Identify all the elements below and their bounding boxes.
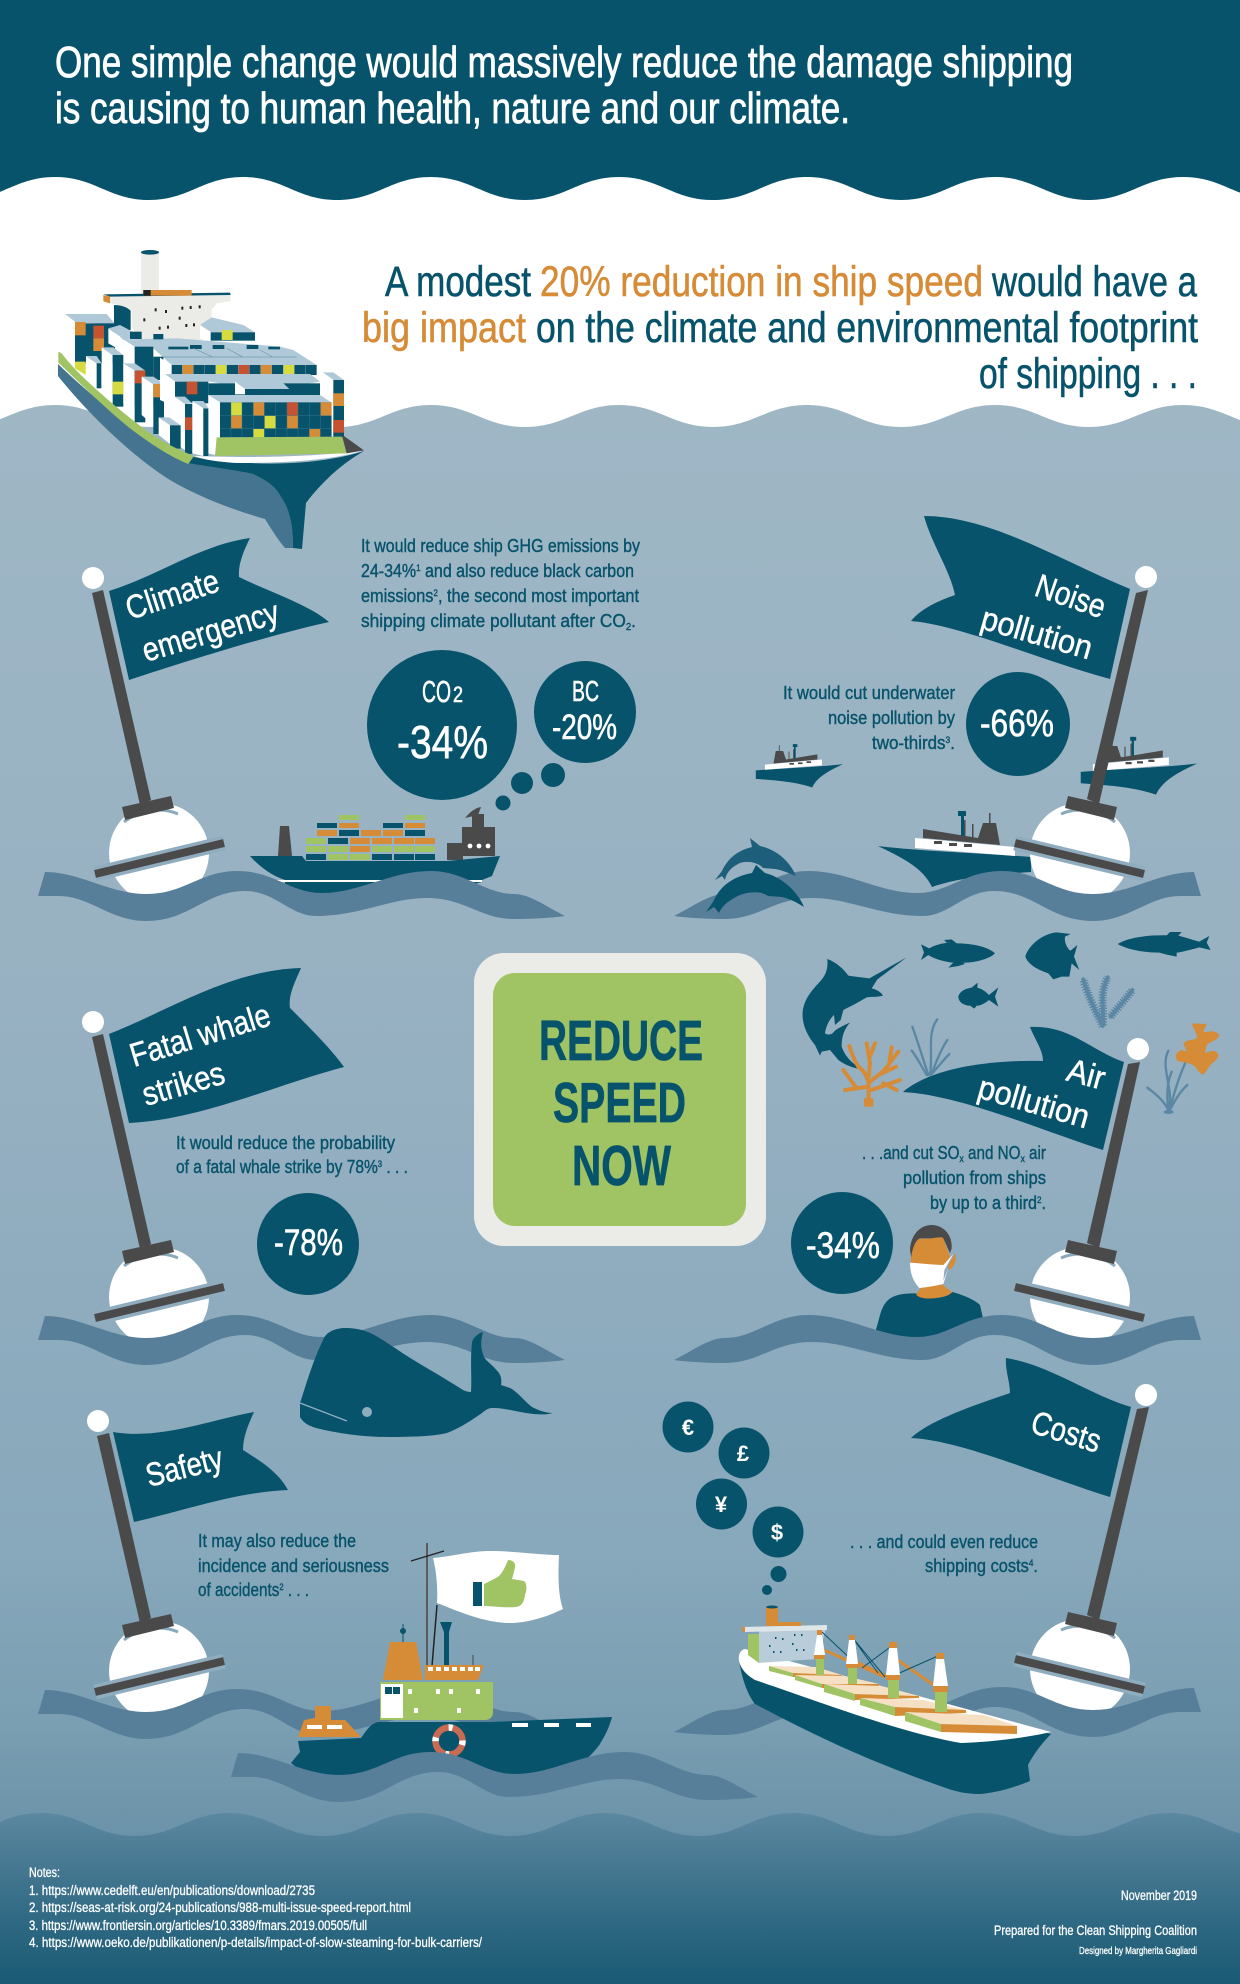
icon: slim fish [1118, 932, 1211, 957]
right tower [323, 372, 344, 437]
wave ribbon: climate [38, 871, 565, 921]
climate text: 2 [626, 622, 632, 633]
flag: fatal whale strikes: strikes [138, 1054, 229, 1113]
currency bubbles: € [682, 1415, 694, 1440]
safety text: incidence and seriousness [198, 1556, 389, 1576]
footer credits [994, 1888, 1197, 1957]
hull [739, 1660, 1051, 1794]
notes: 1. https://www.cedelft.eu/en/publications/download/2735 [29, 1883, 315, 1898]
subtitle [362, 258, 1198, 398]
subtitle: 20% reduction in ship speed [540, 258, 983, 306]
bubble: -34% air [791, 1192, 893, 1294]
wave ribbon: costs [674, 1687, 1201, 1737]
air text: 2 [1037, 1195, 1041, 1205]
costs text: 4 [1029, 1558, 1033, 1568]
superstructure [748, 1634, 759, 1663]
notes: Notes: [29, 1865, 60, 1880]
safety text: . . . [284, 1580, 309, 1600]
bubble: -66%: -66% [980, 703, 1054, 745]
bubble: CO2 -34% [367, 650, 517, 800]
air text: x [1021, 1154, 1025, 1165]
noise text [783, 683, 955, 753]
flag: air pollution: pollution [974, 1068, 1094, 1135]
buoy: whale strikes [82, 1011, 224, 1347]
superstructure [400, 1628, 406, 1634]
safety text [198, 1531, 389, 1600]
flag with thumb [433, 1551, 563, 1623]
flag: climate emergency: emergency [137, 593, 284, 669]
middle block [108, 325, 317, 407]
front block [208, 395, 332, 455]
center box: reduce speed now: REDUCE [539, 1009, 703, 1073]
icon: small ship right [1081, 737, 1197, 795]
whale text: It would reduce the probability [176, 1133, 395, 1153]
buoy: costs [1015, 1384, 1157, 1719]
icon: container ship small [250, 807, 500, 899]
icon: ship in front of noise buoy [878, 811, 1031, 887]
buoy: climate [82, 567, 224, 903]
bubble: CO2 -34%: -34% [397, 716, 488, 768]
climate text: 2 [433, 588, 438, 598]
noise text: noise pollution by [828, 708, 955, 728]
flag: climate emergency [109, 538, 329, 680]
currency bubbles: £ [737, 1441, 750, 1466]
booms [824, 1650, 938, 1688]
climate text: emissions [361, 586, 441, 606]
climate text: . [631, 611, 636, 631]
flag: noise pollution: Noise [1031, 567, 1111, 625]
flag: climate emergency: Climate [121, 562, 223, 627]
flag: air pollution [903, 1027, 1124, 1150]
header band with wave [0, 0, 1240, 200]
bubble: CO2 -34%: CO [422, 674, 451, 709]
currency bubbles: ¥ [715, 1492, 728, 1517]
subtitle: big impact [362, 304, 526, 352]
wave ribbon: safety lower [231, 1752, 758, 1802]
icon: bulk carrier [739, 1606, 1051, 1794]
noise text: 3 [946, 735, 950, 745]
icon: dolphins [706, 838, 804, 913]
wave ribbon: air [674, 1315, 1201, 1365]
life ring [436, 1728, 462, 1754]
icon: seaweed centre [912, 1019, 949, 1075]
left side stacks [86, 347, 208, 456]
notes: 4. https://www.oeko.de/publikationen/p-details/impact-of-slow-steaming-for-bulk-carriers/ [29, 1935, 482, 1950]
footer credits: Prepared for the Clean Shipping Coalition [994, 1923, 1197, 1938]
flag: safety [113, 1412, 288, 1522]
flag: costs: Costs [1027, 1403, 1106, 1459]
icon: person with mask [875, 1225, 983, 1343]
footer band with wave [0, 1813, 1240, 1984]
bubble: -66% [966, 672, 1070, 776]
center box: reduce speed now [474, 953, 766, 1246]
bubble: -34% air: -34% [806, 1225, 880, 1266]
bubble: BC -20% [534, 661, 636, 763]
bubble: BC -20%: BC [572, 676, 599, 708]
flag: costs [911, 1358, 1131, 1497]
flag: fatal whale strikes [109, 968, 344, 1123]
safety text: It may also reduce the [198, 1531, 356, 1551]
climate text: It would reduce ship GHG emissions by [361, 536, 640, 556]
costs text: . . . and could even reduce [850, 1532, 1038, 1552]
superstructure [103, 290, 231, 340]
currency bubbles [662, 1402, 804, 1595]
center box: reduce speed now: NOW [572, 1134, 671, 1198]
front mid row [165, 374, 320, 407]
air text: and NO [964, 1143, 1021, 1163]
safety text: 2 [279, 1582, 284, 1592]
notes: 3. https://www.frontiersin.org/articles/10.3389/fmars.2019.00505/full [29, 1918, 367, 1933]
mast [411, 1543, 444, 1666]
air text: air [1025, 1143, 1046, 1163]
costs text: shipping costs [925, 1556, 1039, 1576]
cranes [814, 1630, 948, 1712]
icon: angelfish [1025, 932, 1079, 979]
subtitle: A modest [385, 258, 531, 306]
back stack [65, 314, 115, 375]
climate text: , the second most important [438, 586, 639, 606]
center box: reduce speed now: SPEED [553, 1071, 686, 1135]
bubble: -78% [257, 1193, 359, 1295]
bubble: CO2 -34%: 2 [453, 682, 463, 707]
icon: small ship left [756, 744, 843, 787]
hatches [769, 1666, 1017, 1734]
bubble: BC -20%: -20% [552, 708, 617, 747]
icon: orange coral [843, 1043, 900, 1107]
icon: large ship hull [58, 364, 364, 549]
footer credits: Designed by Margherita Gagliardi [1079, 1945, 1197, 1957]
noise text: two-thirds [872, 733, 950, 753]
hull [291, 1717, 612, 1783]
costs text: . [1033, 1556, 1038, 1576]
flag: safety: Safety [142, 1439, 227, 1494]
air text: by up to a third [930, 1193, 1049, 1213]
icon: marlin [803, 957, 907, 1069]
deck and green strip [58, 352, 364, 464]
sea background with wave [0, 405, 1240, 1984]
costs text [850, 1532, 1038, 1576]
climate text: 24-34% [361, 561, 423, 581]
currency bubbles: $ [771, 1520, 783, 1545]
flag: air pollution: Air [1063, 1051, 1109, 1097]
buoy: air [1015, 1038, 1149, 1347]
whale text: 3 [378, 1159, 382, 1169]
climate text: 1 [416, 563, 421, 573]
climate text: shipping climate pollutant after CO [361, 611, 636, 631]
safety text: of accidents [198, 1580, 294, 1600]
icon: right sea plants [1147, 1023, 1219, 1114]
funnel [141, 250, 159, 296]
buoy: noise [1015, 566, 1157, 903]
wave ribbon: safety upper [38, 1689, 565, 1739]
flag: noise pollution [911, 516, 1130, 679]
subtitle: would have a [991, 258, 1197, 306]
noise text: It would cut underwater [783, 683, 955, 703]
whale text: of a fatal whale strike by 78% [176, 1157, 410, 1177]
notes [29, 1865, 482, 1950]
icon: fish one [921, 939, 995, 968]
icon: sea life [803, 932, 1211, 1107]
icon: large container ship [58, 250, 364, 464]
noise text: . [950, 733, 955, 753]
bubble: -78%: -78% [274, 1222, 343, 1263]
notes: 2. https://seas-at-risk.org/24-publications/988-multi-issue-speed-report.html [29, 1900, 411, 1915]
icon: orange coral right [1176, 1023, 1219, 1075]
flag: noise pollution: pollution [977, 599, 1097, 666]
title: is causing to human health, nature and our climate. [55, 84, 850, 133]
air text [862, 1143, 1046, 1213]
flag: fatal whale strikes: Fatal whale [125, 996, 275, 1074]
icon: small fish [958, 983, 998, 1009]
small orange boat [298, 1706, 361, 1737]
climate text [361, 536, 640, 633]
icon: seaweed upper [1083, 977, 1132, 1026]
whale text: . . . [382, 1157, 408, 1177]
icon: whale [300, 1328, 553, 1437]
air text: x [960, 1154, 964, 1165]
whale text [176, 1133, 408, 1177]
icon: seaweed right [1147, 1051, 1187, 1114]
wave ribbon: noise [674, 871, 1201, 921]
air text: pollution from ships [903, 1168, 1046, 1188]
icon: safety ship [291, 1543, 612, 1783]
air text: . [1041, 1193, 1046, 1213]
climate text: and also reduce black carbon [421, 561, 634, 581]
thought dots [496, 763, 565, 810]
buoy: safety [87, 1410, 224, 1721]
air text: . . .and cut SO [862, 1143, 977, 1163]
title [55, 38, 1073, 133]
footer credits: November 2019 [1121, 1888, 1197, 1903]
right back stack [200, 317, 255, 343]
wave ribbon: whale [38, 1315, 565, 1365]
